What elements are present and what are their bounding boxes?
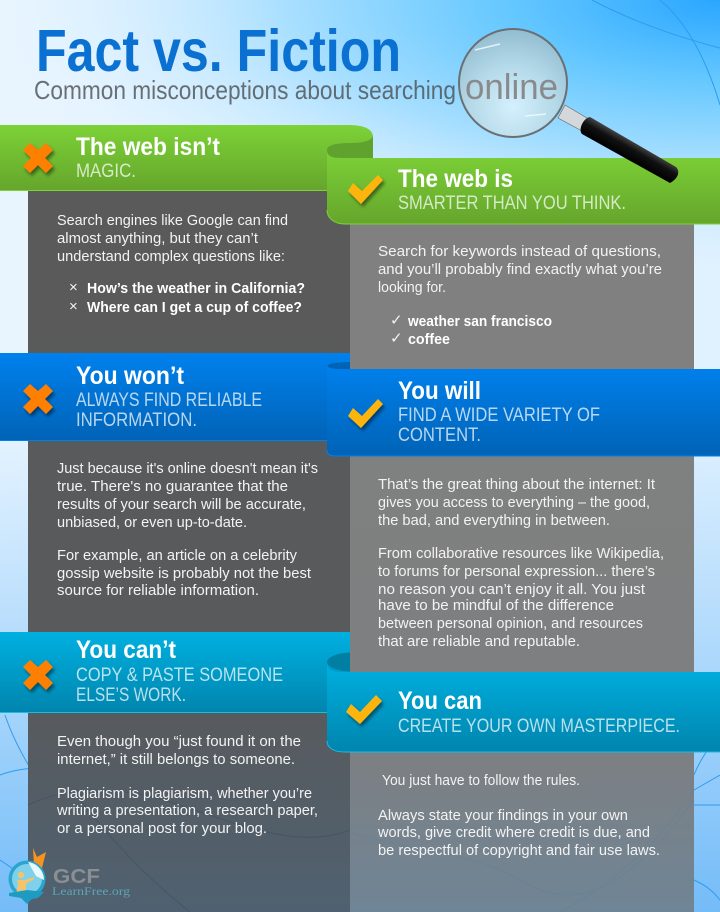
right text: variety of content (378, 476, 664, 650)
logo wordmark: GCF (53, 866, 100, 888)
subheading: MAGIC. (76, 161, 136, 182)
right text: masterpiece (377, 772, 660, 859)
ribbon: you can't (0, 632, 350, 713)
left text: magic: Where can I get a cup of coffee? (87, 300, 302, 316)
left text: magic (57, 212, 305, 316)
right panel lines (350, 790, 694, 912)
left text: plagiarism: writing a presentation, a research paper, (56, 802, 318, 819)
right text: masterpiece: be respectful of copyright and fair use laws. (378, 842, 660, 859)
left text: reliable information: For example, an article on a celebrity (57, 547, 297, 564)
left text: reliable information: unbiased, or even up-to-date. (57, 514, 247, 531)
icon: check (348, 399, 383, 428)
ribbon: you won't: INFORMATION. (76, 410, 197, 431)
left text: reliable information: results of your search will be accurate, (57, 496, 306, 513)
right text: smarter: Search for keywords instead of questions, (378, 243, 661, 260)
magnifier handle (558, 105, 587, 131)
heading: The web is (398, 165, 513, 193)
right text: variety of content: that are reliable and reputable. (378, 633, 580, 650)
magnified word: online (465, 66, 558, 107)
ribbon: you will (327, 364, 720, 456)
right text: variety of content: to forums for personal expression... there’s (378, 563, 655, 580)
right text: smarter: coffee (408, 332, 450, 348)
logo: GCF LearnFree.org: LearnFree.org (52, 884, 130, 898)
left text: plagiarism: Even though you “just found it on the (57, 733, 301, 750)
left text: magic: × (69, 279, 78, 296)
ribbon: you can (327, 662, 720, 752)
heading: You can (398, 687, 482, 715)
icon: cross (23, 660, 53, 690)
left text: magic: How’s the weather in California? (87, 281, 305, 297)
right text: masterpiece: You just have to follow the rules. (382, 772, 580, 789)
left text: reliable information: true. There's no guarantee that the (57, 478, 288, 495)
left panel lines (28, 790, 350, 912)
heading: You can’t (76, 636, 177, 664)
icon: check (346, 695, 382, 724)
left text: reliable information (57, 460, 318, 599)
ribbon: you won't (0, 353, 350, 441)
right text: smarter (378, 243, 662, 348)
right text: smarter: weather san francisco (407, 314, 552, 330)
logo: GCF LearnFree.org (8, 848, 130, 904)
left text: plagiarism: Plagiarism is plagiarism, whether you’re (57, 785, 312, 802)
icon: star (33, 848, 46, 868)
icon: check (348, 175, 383, 204)
right text: smarter: and you’ll probably find exactly what you’re (378, 261, 662, 278)
ribbon: the web is (327, 150, 720, 224)
title: Fact vs. Fiction (36, 18, 401, 84)
subheading: ALWAYS FIND RELIABLE (76, 390, 262, 411)
right text: masterpiece: words, give credit where credit is due, and (377, 824, 650, 841)
left text: magic: almost anything, but they can’t (57, 230, 259, 247)
subheading: FIND A WIDE VARIETY OF (398, 405, 600, 426)
heading: You won’t (76, 362, 185, 390)
left text: reliable information: gossip website is probably not the best (57, 565, 312, 582)
right text: masterpiece: Always state your findings in your own (378, 807, 628, 824)
right text: variety of content: From collaborative resources like Wikipedia, (378, 545, 664, 562)
heading: You will (398, 377, 481, 405)
subheading: COPY & PASTE SOMEONE (76, 665, 283, 686)
right text: variety of content: the bad, and everything in between. (378, 512, 610, 529)
icon: magnifying glass (459, 29, 678, 183)
right text: variety of content: have to be mindful of the difference (378, 597, 614, 614)
ribbon folds (327, 135, 377, 672)
subtitle: Common misconceptions about searching (34, 75, 456, 105)
magnifier lens (459, 29, 567, 137)
left text: reliable information: source for reliable information. (57, 582, 259, 599)
icon: cross (23, 143, 53, 173)
right column panel (350, 224, 694, 912)
right text: smarter: ✓ (390, 311, 403, 329)
ribbon: you will: CONTENT. (398, 425, 481, 446)
left text: plagiarism: or a personal post for your blog. (57, 820, 267, 837)
right text: variety of content: no reason you can’t enjoy it all. You just (378, 581, 646, 598)
left text: plagiarism: internet,” it still belongs to someone. (57, 751, 295, 768)
right text: variety of content: That’s the great thing about the internet: It (378, 476, 656, 493)
left text: reliable information: Just because it's online doesn't mean it's (57, 460, 318, 477)
right text: smarter: ✓ (390, 329, 403, 347)
heading: The web isn’t (76, 133, 221, 161)
right text: variety of content: gives you access to everything – the good, (378, 494, 650, 511)
left column panel (28, 191, 350, 912)
right text: smarter: looking for. (378, 279, 446, 296)
subheading: SMARTER THAN YOU THINK. (398, 193, 626, 214)
left text: magic: Search engines like Google can find (57, 212, 288, 229)
left text: magic: understand complex questions like: (57, 248, 285, 265)
right text: variety of content: between personal opinion, and resources (378, 615, 643, 632)
left text: magic: × (69, 298, 78, 315)
ribbon: you can't: ELSE’S WORK. (76, 685, 186, 706)
ribbon: the web isn't (0, 125, 373, 191)
left text: plagiarism (56, 733, 318, 837)
icon: cross (23, 384, 53, 414)
